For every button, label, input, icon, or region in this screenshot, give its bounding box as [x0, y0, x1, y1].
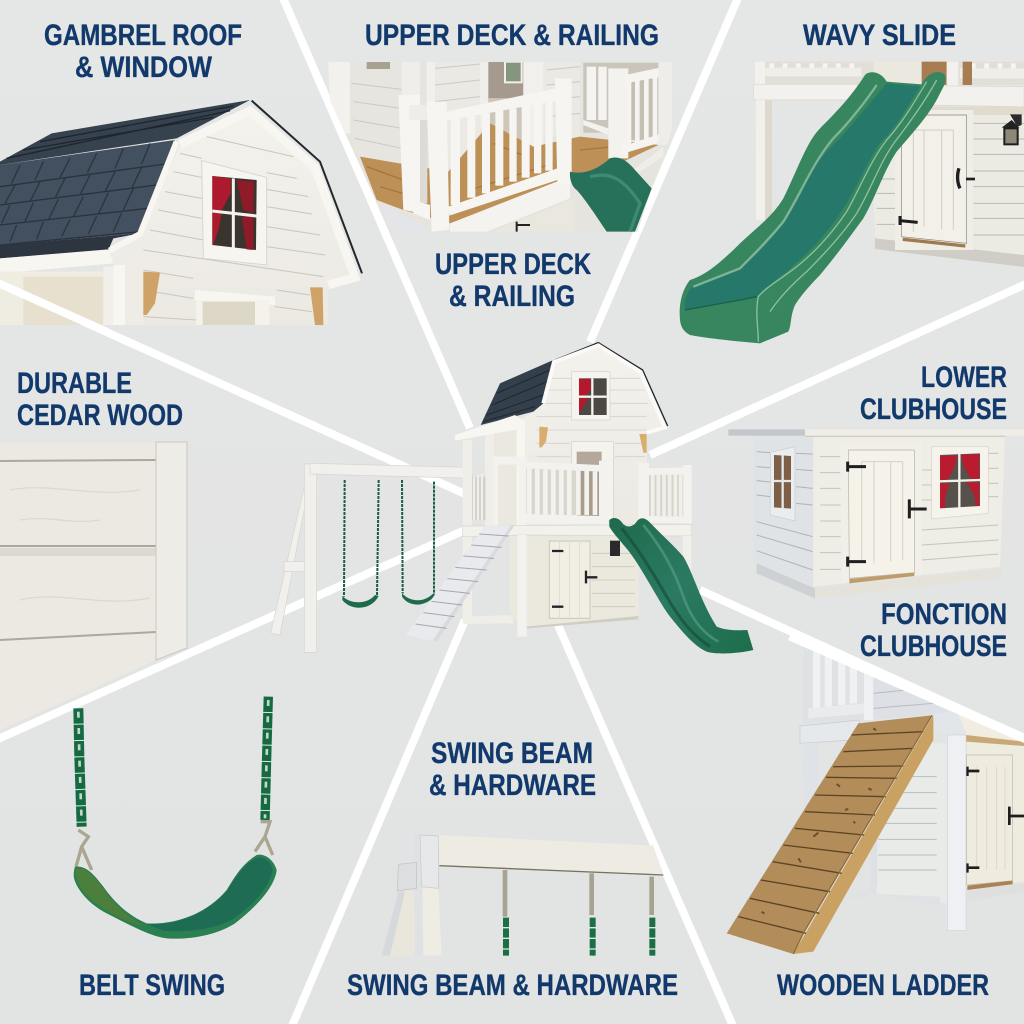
heading: swing beam bottom: SWING BEAM & HARDWARE	[347, 969, 678, 1002]
swing seats	[342, 593, 436, 608]
heading: belt swing: BELT SWING	[79, 969, 225, 1002]
door	[549, 541, 597, 618]
back posts and deck side	[463, 433, 513, 624]
heading: upper deck center	[435, 248, 591, 313]
panel: durable cedar wood	[0, 442, 187, 730]
heading: upper deck center: & RAILING	[449, 280, 575, 313]
heading: upper deck top: UPPER DECK & RAILING	[365, 19, 659, 52]
heading: gambrel roof	[44, 19, 242, 84]
lower clubhouse	[510, 536, 638, 628]
heading: lower clubhouse	[860, 361, 1007, 426]
center ramp	[406, 526, 514, 642]
house walls	[328, 62, 580, 148]
heading: swing beam center	[429, 737, 596, 802]
lantern	[610, 541, 620, 556]
swing frame	[271, 463, 473, 652]
front post	[517, 535, 527, 637]
heading: durable cedar wood	[17, 367, 183, 432]
heading: swing beam center: & HARDWARE	[429, 769, 596, 802]
lower window frame	[195, 290, 275, 325]
front post	[947, 735, 966, 931]
front wall	[813, 436, 1005, 587]
front window	[932, 447, 988, 519]
upper rail and beam	[753, 62, 1024, 220]
deck floor	[360, 123, 658, 223]
roof trim	[555, 343, 668, 426]
heading: upper deck center: UPPER DECK	[435, 248, 591, 281]
deck beam	[463, 524, 692, 537]
panel: gambrel roof	[0, 100, 362, 325]
heading: swing beam center: SWING BEAM	[431, 737, 593, 770]
lower clubhouse wall	[872, 107, 1024, 255]
front railing	[398, 78, 572, 232]
side wall	[753, 436, 813, 587]
rear railing	[583, 62, 673, 158]
side window	[770, 447, 795, 521]
upper door	[572, 442, 613, 523]
heading: gambrel roof: GAMBREL ROOF	[44, 19, 242, 52]
side wall	[877, 743, 947, 903]
heading: durable cedar wood: DURABLE	[17, 367, 132, 400]
center slide	[609, 518, 753, 653]
porch post	[517, 422, 525, 532]
eave and porch	[0, 249, 143, 325]
upper window	[572, 372, 610, 420]
roof	[481, 360, 553, 425]
frame	[382, 834, 663, 956]
roof slab	[728, 429, 1024, 437]
swing chains	[344, 480, 434, 597]
icon: shingled roof	[0, 100, 250, 258]
window with red curtains	[202, 161, 267, 265]
heading: wavy slide: WAVY SLIDE	[803, 19, 956, 52]
divider over roof panel	[0, 283, 105, 331]
front wall and door	[966, 735, 1024, 902]
wall: white siding	[109, 116, 349, 298]
hardware	[76, 822, 273, 870]
gable trim	[180, 111, 355, 285]
heading: durable cedar wood: CEDAR WOOD	[17, 399, 183, 432]
panel: wooden ladder	[727, 645, 1024, 954]
heading: gambrel roof: & WINDOW	[75, 51, 213, 84]
upper wall	[517, 345, 667, 527]
panel: swing beam	[382, 834, 663, 956]
big green slide	[680, 72, 946, 343]
panel: wavy slide	[680, 62, 1024, 343]
heading: fonction clubhouse	[860, 598, 1007, 663]
wooden brackets	[539, 427, 647, 453]
ladder	[727, 715, 933, 954]
front deck railing	[493, 457, 692, 535]
seat	[74, 855, 277, 939]
central playset	[271, 343, 753, 653]
bottom fascia	[380, 147, 663, 232]
green slide end	[570, 157, 652, 232]
clubhouse door	[840, 442, 927, 583]
chains	[78, 697, 268, 827]
lantern	[1002, 114, 1022, 144]
railing	[800, 645, 1024, 808]
panel: lower clubhouse	[728, 429, 1024, 598]
divider over ladder panel	[790, 636, 1024, 739]
eave	[455, 415, 525, 441]
swing hardware	[505, 870, 652, 956]
door	[895, 110, 975, 250]
wooden brackets	[143, 272, 323, 325]
panel: upper deck	[320, 62, 680, 232]
panel: belt swing	[74, 697, 277, 939]
